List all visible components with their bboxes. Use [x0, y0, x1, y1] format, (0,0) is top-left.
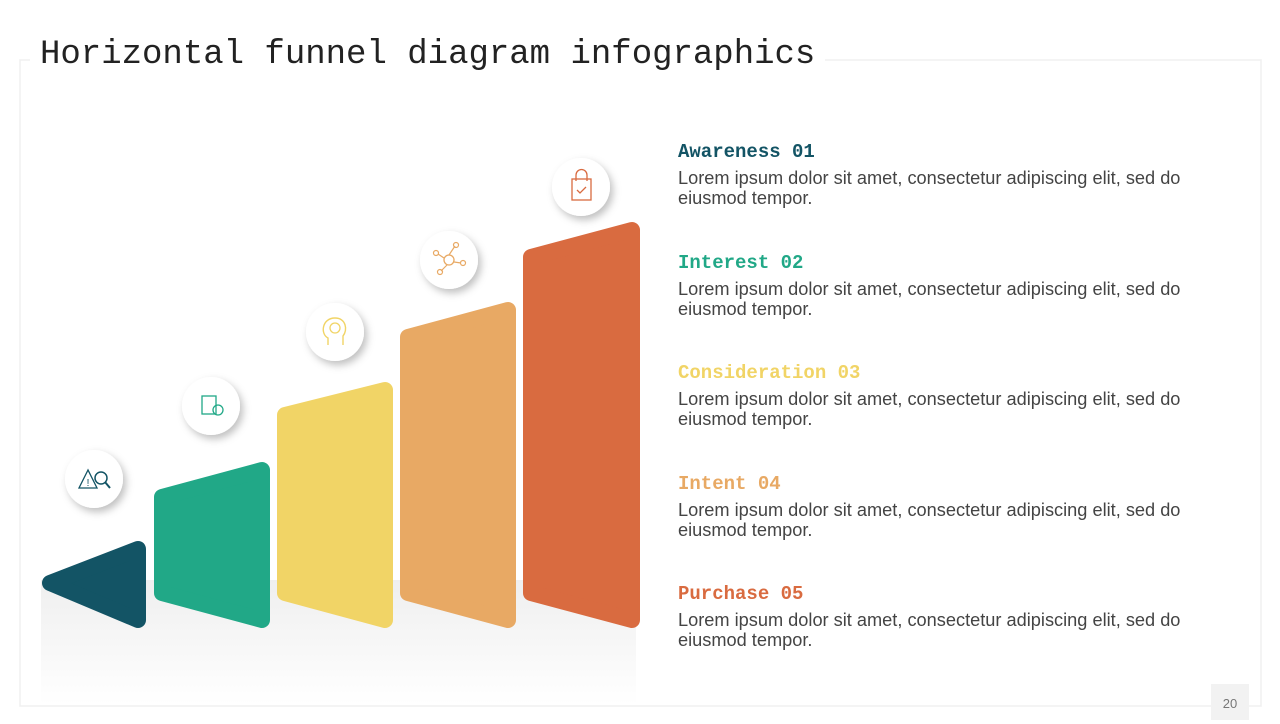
bar 2 interest — [162, 470, 262, 620]
text: interest — [678, 252, 1180, 319]
bar 1 awareness — [50, 549, 138, 620]
text: purchase — [678, 583, 1180, 650]
text: purchase: Lorem ipsum dolor sit amet, consectetur adipiscing elit, sed do eiusmod tempor. — [678, 610, 1180, 650]
text: intent: Intent 04 — [678, 473, 781, 495]
page number: 20 — [1223, 696, 1237, 711]
text: intent: Lorem ipsum dolor sit amet, consectetur adipiscing elit, sed do eiusmod tempor. — [678, 500, 1180, 540]
title: Horizontal funnel diagram infographics — [40, 36, 815, 74]
bar 3 consideration — [285, 390, 385, 620]
text: consideration: Lorem ipsum dolor sit amet, consectetur adipiscing elit, sed do eiusmod tempor. — [678, 389, 1180, 428]
text: consideration: Consideration 03 — [678, 362, 860, 384]
icon circle 3 — [306, 303, 364, 361]
icon circle 4 — [420, 231, 478, 289]
text: intent — [678, 473, 1180, 540]
text: purchase: Purchase 05 — [678, 583, 803, 605]
page number — [1211, 684, 1249, 720]
text: interest: Interest 02 — [678, 252, 803, 274]
bar 4 intent — [408, 310, 508, 620]
icon circle 1: ! — [87, 478, 89, 489]
text: consideration — [678, 362, 1180, 429]
icon circle 2 — [182, 377, 240, 435]
icon circle 5 — [552, 158, 610, 216]
text: awareness: Lorem ipsum dolor sit amet, consectetur adipiscing elit, sed do eiusmod tempor. — [678, 168, 1180, 208]
text: awareness — [678, 141, 1180, 208]
text: interest: Lorem ipsum dolor sit amet, consectetur adipiscing elit, sed do eiusmod tempor. — [678, 279, 1180, 318]
icon circle 1 — [65, 450, 123, 508]
bar 5 purchase — [531, 230, 632, 620]
text: awareness: Awareness 01 — [678, 141, 815, 163]
